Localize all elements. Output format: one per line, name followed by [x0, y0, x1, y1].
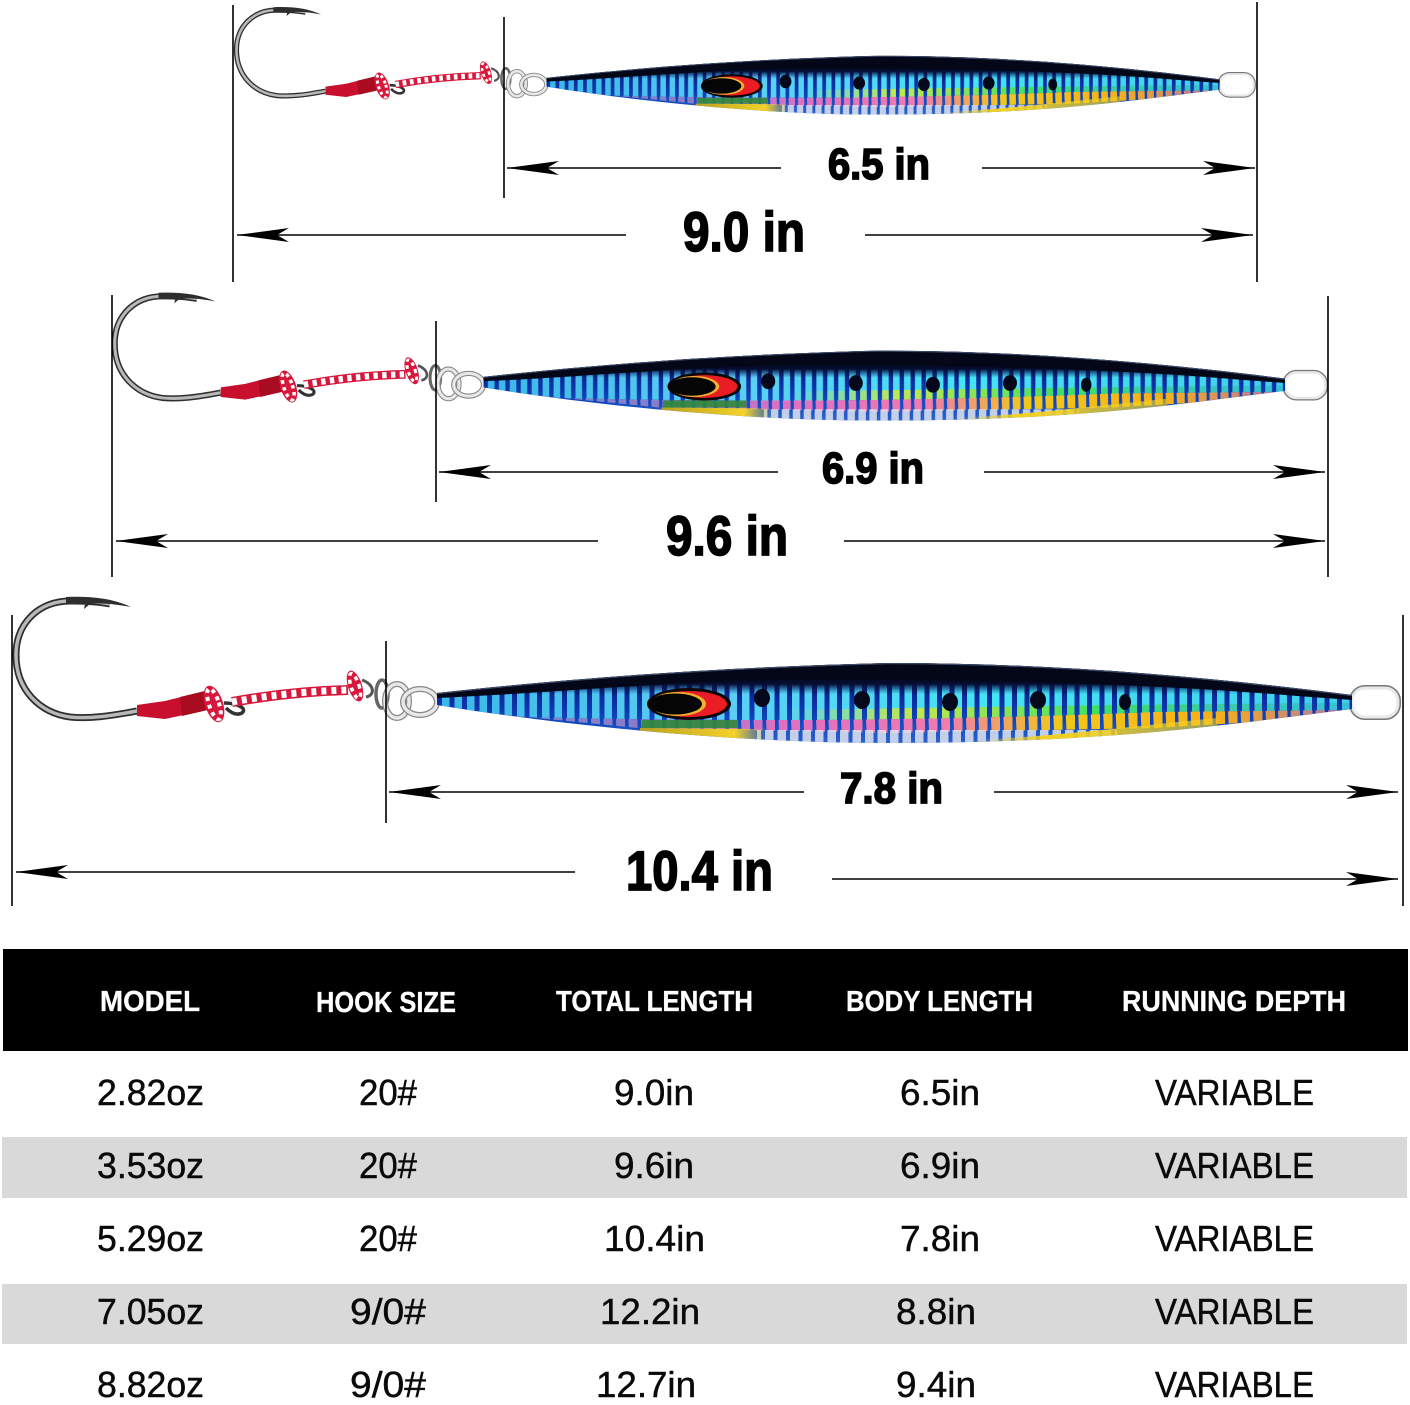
row: 8.82oz: 9/0#: [350, 1364, 426, 1405]
row: 8.82oz: 8.82oz: [97, 1364, 204, 1405]
row: 8.82oz: 12.7in: [596, 1364, 696, 1405]
specification table: [2, 949, 1408, 1405]
row: 2.82oz: 2.82oz: [97, 1072, 204, 1113]
total length dimension: 10.4 in: [16, 839, 1398, 902]
row: 5.29oz: [97, 1218, 1314, 1259]
lure 1: 2.82oz jig with assist hook: [236, 7, 1254, 117]
row: 3.53oz: 20#: [359, 1145, 417, 1186]
body length dimension: 7.8 in: [389, 764, 1398, 813]
row: 7.05oz: 7.05oz: [97, 1291, 204, 1332]
total length dimension: 9.0 in: 9.0 in: [683, 200, 805, 263]
row: 7.05oz: [2, 1284, 1407, 1344]
row: 3.53oz: [2, 1137, 1407, 1198]
row: 7.05oz: 9/0#: [350, 1291, 426, 1332]
body length dimension: 6.9 in: 6.9 in: [822, 444, 924, 493]
table header row: [3, 949, 1408, 1051]
row: 5.29oz: 10.4in: [604, 1218, 705, 1259]
dimensions for lure 2: [112, 295, 1328, 577]
table header row: MODEL: [100, 986, 200, 1018]
body length dimension: 6.5 in: 6.5 in: [828, 140, 930, 189]
row: 3.53oz: 3.53oz: [97, 1145, 204, 1186]
row: 8.82oz: 9.4in: [896, 1364, 976, 1405]
dimensions for lure 3: [12, 615, 1403, 906]
body length dimension: 6.5 in: [507, 140, 1255, 189]
row: 2.82oz: 20#: [359, 1072, 417, 1113]
table header row: TOTAL LENGTH: [556, 986, 753, 1018]
row: 5.29oz: 7.8in: [900, 1218, 980, 1259]
row: 3.53oz: 9.6in: [614, 1145, 694, 1186]
row: 5.29oz: VARIABLE: [1155, 1218, 1314, 1259]
row: 7.05oz: 12.2in: [600, 1291, 700, 1332]
row: 7.05oz: 8.8in: [896, 1291, 976, 1332]
row: 2.82oz: VARIABLE: [1155, 1072, 1314, 1113]
body length dimension: 6.9 in: [439, 444, 1325, 493]
row: 2.82oz: [97, 1072, 1314, 1113]
dimensions for lure 1: [233, 2, 1257, 282]
row: 8.82oz: [97, 1364, 1314, 1405]
row: 5.29oz: 20#: [359, 1218, 417, 1259]
row: 5.29oz: 5.29oz: [97, 1218, 204, 1259]
total length dimension: 9.6 in: 9.6 in: [666, 504, 788, 567]
row: 8.82oz: VARIABLE: [1155, 1364, 1314, 1405]
total length dimension: 9.6 in: [116, 504, 1325, 567]
row: 2.82oz: 9.0in: [614, 1072, 694, 1113]
row: 3.53oz: 6.9in: [900, 1145, 980, 1186]
lure 2: 3.53oz jig with assist hook: [115, 293, 1325, 423]
table header row: RUNNING DEPTH: [1122, 986, 1346, 1018]
table header row: HOOK SIZE: [316, 987, 456, 1019]
total length dimension: 9.0 in: [237, 200, 1253, 263]
table header row: BODY LENGTH: [846, 986, 1033, 1018]
body length dimension: 7.8 in: 7.8 in: [840, 764, 943, 813]
row: 2.82oz: 6.5in: [900, 1072, 980, 1113]
lure 3: 5.29oz jig with assist hook: [16, 597, 1398, 746]
total length dimension: 10.4 in: 10.4 in: [626, 839, 773, 902]
row: 3.53oz: VARIABLE: [1155, 1145, 1314, 1186]
row: 7.05oz: VARIABLE: [1155, 1291, 1314, 1332]
